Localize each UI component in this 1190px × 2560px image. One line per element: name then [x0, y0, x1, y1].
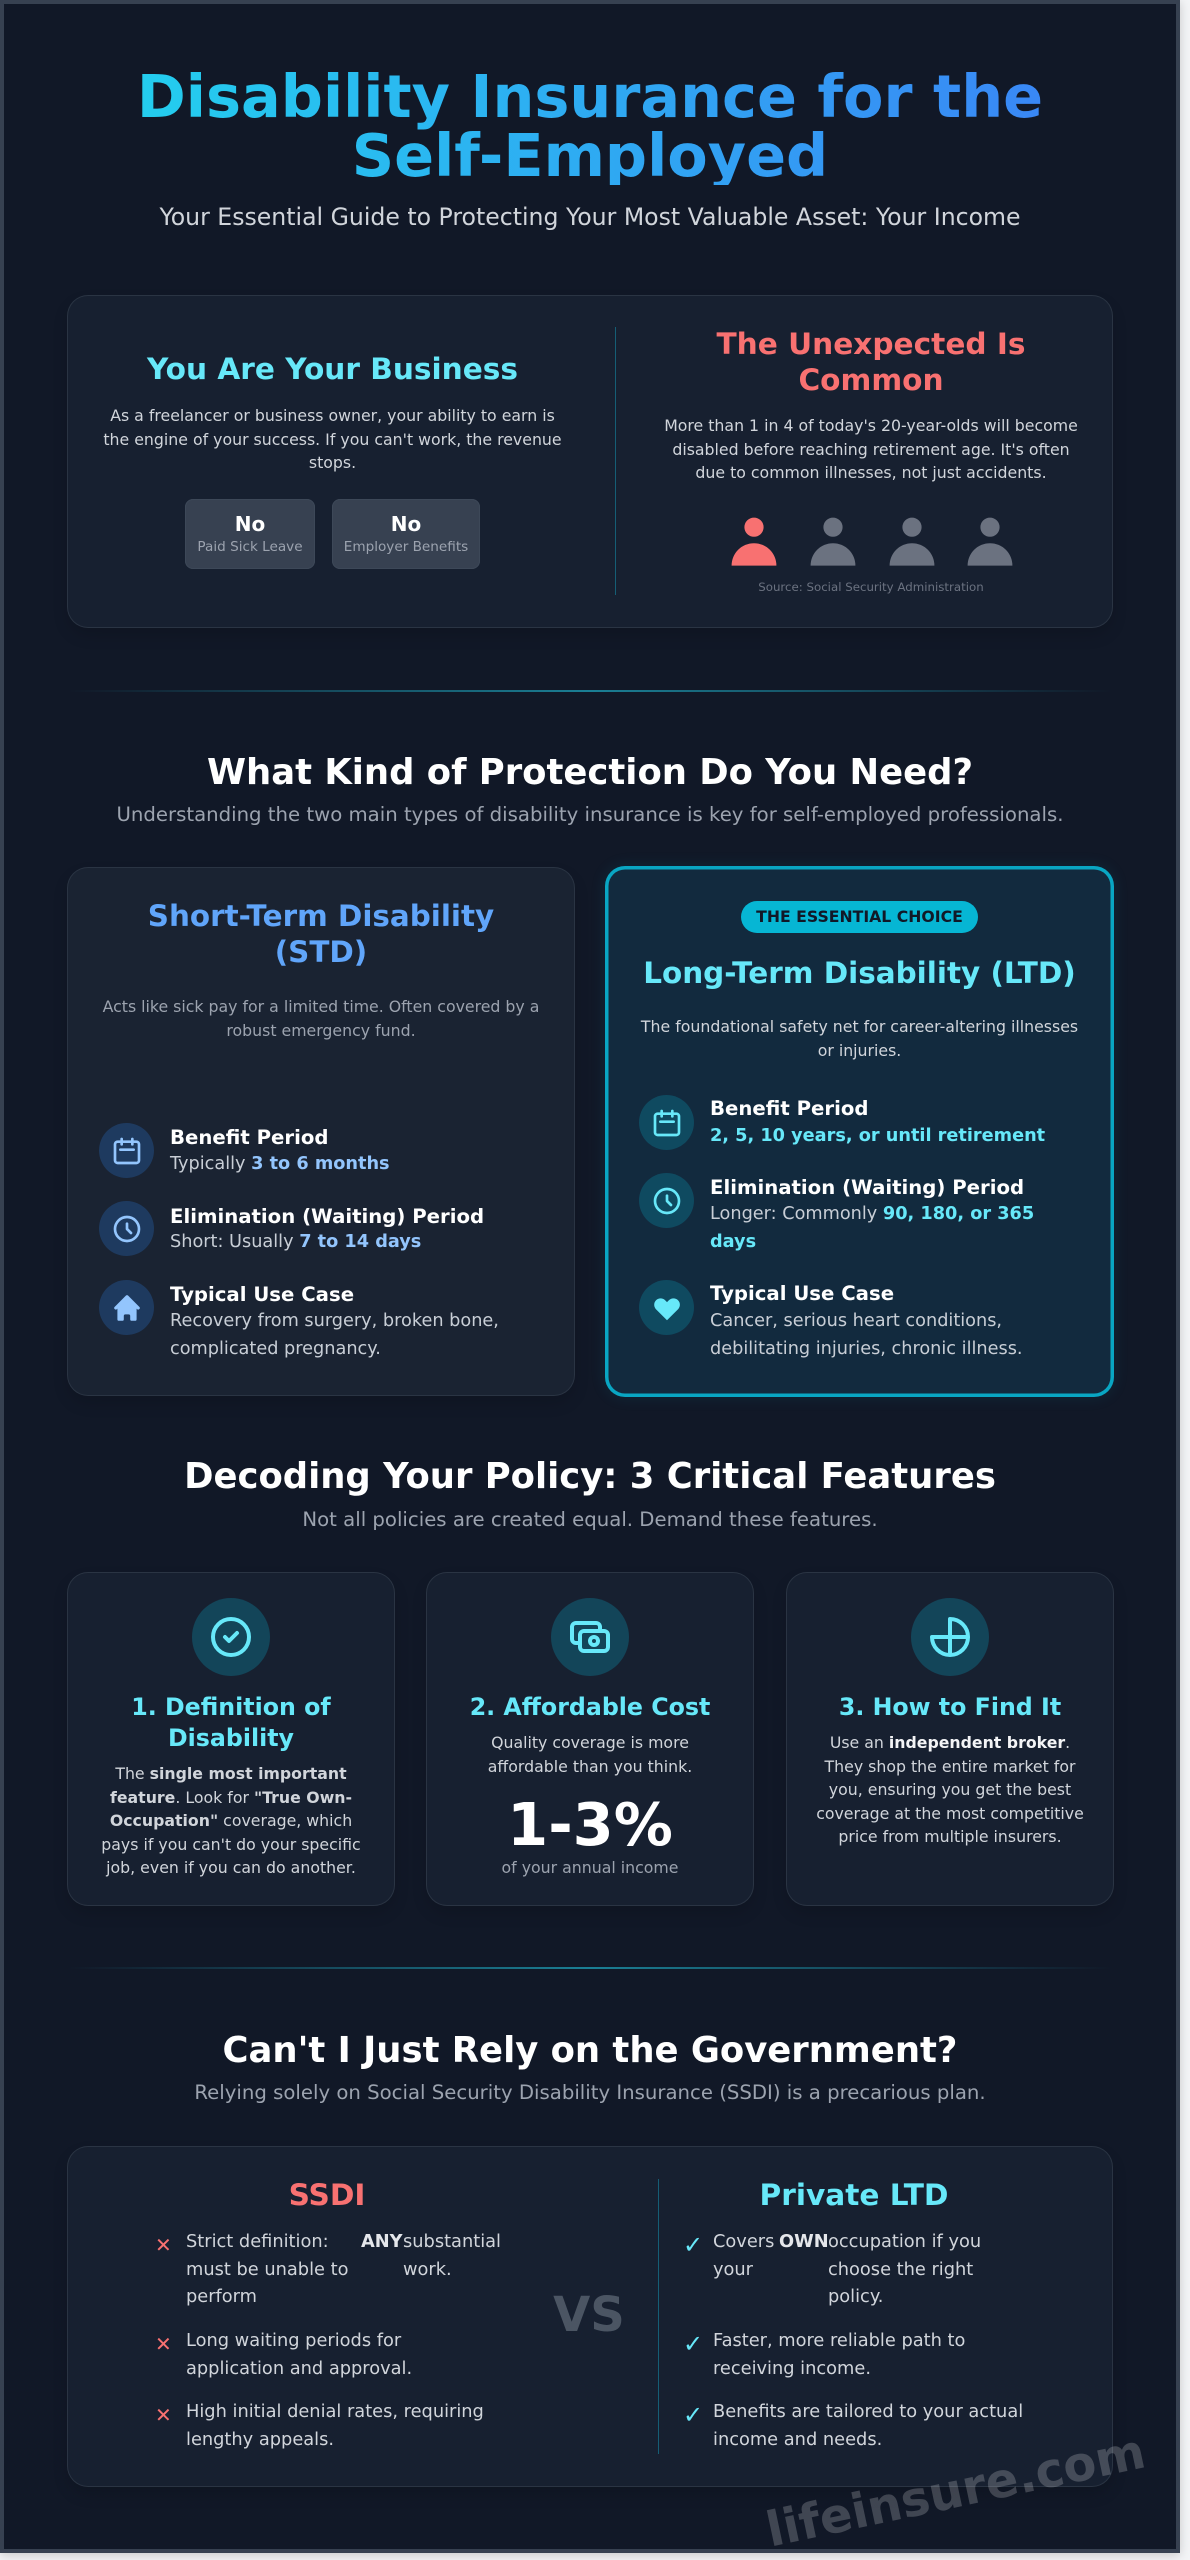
row: typical use case: complicated pregnancy. [170, 1339, 381, 1359]
item: covers own occupation: policy. [828, 2286, 883, 2307]
badge: no employer benefits: Employer Benefits [344, 539, 468, 555]
subheading: decoding: Not all policies are created equal. Demand these features. [302, 1508, 878, 1531]
heading: 1. Definition of [131, 1693, 331, 1721]
text: STD: robust emergency fund. [226, 1020, 416, 1040]
item: faster path: ✓ [683, 2330, 703, 2358]
row: elimination period: Elimination (Waiting) Period [710, 1176, 1024, 1199]
panel: short-term disability [68, 868, 574, 1395]
text [816, 1733, 1084, 1846]
item: denial rates: High initial denial rates, requiring [186, 2401, 484, 2422]
item: tailored benefits: ✓ [683, 2401, 703, 2429]
row: benefit period [639, 1095, 1045, 1150]
text: you are your business: As a freelancer or business owner, your ability to earn is [110, 406, 555, 425]
text: you are your business: stops. [309, 453, 356, 472]
text: job, even if you can do another. [106, 1858, 356, 1877]
card: definition of disability [68, 1573, 394, 1905]
badge: no employer benefits: No [391, 512, 421, 536]
item: denial rates: lengthy appeals. [186, 2429, 334, 2450]
row: elimination period: Elimination (Waiting) Period [170, 1205, 484, 1228]
text: LTD: The foundational safety net for career-altering illnesses [641, 1017, 1078, 1036]
item: strict definition: substantial [403, 2231, 501, 2252]
text: STD: Acts like sick pay for a limited time. Often covered by a [103, 997, 539, 1016]
item: long waiting: Long waiting periods for [186, 2330, 401, 2351]
heading: the unexpected is common: Common [798, 363, 944, 397]
row: benefit period: 2, 5, 10 years, or until retirement [710, 1126, 1045, 1146]
heading: the unexpected is common: The Unexpected Is [716, 327, 1026, 361]
title: Self-Employed [352, 121, 828, 190]
item: strict definition: ✕ [155, 2233, 172, 2257]
icon: calendar [99, 1123, 154, 1178]
text: you, ensuring you get the best [829, 1780, 1071, 1799]
row: benefit period: Typically 3 to 6 months [170, 1154, 390, 1174]
badge: the essential choice: THE ESSENTIAL CHOICE [756, 907, 963, 926]
item: strict definition: must be unable to [186, 2259, 348, 2280]
source note: Source: Social Security Administration [758, 580, 984, 594]
item: strict definition: Strict definition: [186, 2231, 329, 2252]
text: the unexpected is common: due to common illnesses, not just accidents. [695, 463, 1047, 482]
item: long waiting: application and approval. [186, 2358, 412, 2379]
icon: clock [639, 1173, 694, 1228]
item: tailored benefits: Benefits are tailored to your actual [713, 2401, 1023, 2422]
heading: 2. Affordable Cost [470, 1693, 710, 1721]
item: strict definition: perform [186, 2286, 257, 2307]
item: faster path: receiving income. [713, 2358, 871, 2379]
title [68, 67, 1112, 185]
icon: cash [551, 1598, 629, 1676]
text: pays if you can't do your specific [101, 1835, 361, 1854]
heading: government: Can't I Just Rely on the Government? [223, 2030, 957, 2071]
item: long waiting: ✕ [155, 2332, 172, 2356]
item: covers own occupation: choose the right [828, 2259, 973, 2280]
text: Occupation" coverage, which [110, 1811, 352, 1830]
row: benefit period: Benefit Period [710, 1097, 868, 1120]
icon: quartered circle [911, 1598, 989, 1676]
text: STD [102, 997, 539, 1040]
item: long waiting [155, 2330, 412, 2379]
card: affordable cost [427, 1573, 753, 1905]
badge: no employer benefits [332, 499, 480, 569]
text: They shop the entire market for [825, 1757, 1075, 1776]
row: benefit period [99, 1123, 390, 1178]
text: price from multiple insurers. [838, 1827, 1062, 1846]
card: how to find it [787, 1573, 1113, 1905]
subheading: protection: Understanding the two main types of disability insurance is key for self-employed professionals. [116, 803, 1063, 826]
icon: heart [639, 1280, 694, 1335]
text: LTD: or injuries. [818, 1040, 901, 1060]
item: strict definition [155, 2231, 501, 2307]
item: covers own occupation [683, 2231, 981, 2307]
panel: intro [68, 296, 1112, 627]
text: Use an independent broker. [830, 1733, 1070, 1752]
row: elimination period: Longer: Commonly 90, 180, or 365 [710, 1204, 1034, 1224]
badge: no paid sick leave: No [235, 512, 265, 536]
heading: STD: (STD) [275, 934, 367, 968]
text: Quality coverage is more [491, 1733, 689, 1752]
text: the unexpected is common: More than 1 in 4 of today's 20-year-olds will become [664, 416, 1078, 435]
icon: calendar [639, 1095, 694, 1150]
row: typical use case: Typical Use Case [710, 1282, 894, 1305]
icon: home [99, 1280, 154, 1335]
text: the unexpected is common [664, 416, 1078, 482]
icon: clock [99, 1201, 154, 1256]
badge: no paid sick leave: Paid Sick Leave [197, 539, 303, 555]
subtitle: Your Essential Guide to Protecting Your Most Valuable Asset: Your Income [159, 203, 1021, 231]
item: covers own occupation: occupation if you [828, 2231, 981, 2252]
stat: 1-3%: 1-3% [507, 1790, 673, 1859]
VS label: VS [553, 2287, 625, 2343]
text: you are your business [103, 406, 562, 472]
row: typical use case: Cancer, serious heart conditions, [710, 1311, 1002, 1331]
heading: protection: What Kind of Protection Do You Need? [207, 752, 973, 793]
panel: long-term disability [605, 866, 1114, 1397]
heading: private LTD: Private LTD [760, 2178, 948, 2212]
item: strict definition: ANY [361, 2231, 403, 2252]
icon: check circle [192, 1598, 270, 1676]
heading: you are your business: You Are Your Business [147, 352, 518, 386]
badge: the essential choice [741, 901, 978, 933]
heading: Disability [168, 1724, 294, 1752]
row: elimination period: days [710, 1232, 756, 1252]
text: you are your business: the engine of your success. If you can't work, the revenue [103, 430, 562, 449]
panel: SSDI vs private LTD [68, 2147, 1112, 2486]
item: strict definition: work. [403, 2259, 452, 2280]
item: denial rates: ✕ [155, 2403, 172, 2427]
row: typical use case: Recovery from surgery, broken bone, [170, 1311, 499, 1331]
item: covers own occupation: ✓ [683, 2231, 703, 2259]
heading: LTD: Long-Term Disability (LTD) [643, 956, 1076, 990]
text: feature. Look for "True Own- [110, 1788, 352, 1807]
badge: no paid sick leave [185, 499, 315, 569]
row: typical use case [639, 1280, 1023, 1359]
subheading: government: Relying solely on Social Security Disability Insurance (SSDI) is a precarious plan. [194, 2081, 986, 2104]
text [488, 1733, 692, 1776]
text: affordable than you think. [488, 1757, 692, 1776]
heading: STD [148, 899, 494, 968]
text: The single most important [115, 1764, 347, 1783]
heading: decoding: Decoding Your Policy: 3 Critical Features [184, 1456, 996, 1497]
text: LTD [640, 1017, 1078, 1060]
item: covers own occupation: OWN [779, 2231, 829, 2252]
item: faster path [683, 2330, 965, 2379]
item: tailored benefits [683, 2401, 1023, 2450]
item: covers own occupation: Covers [713, 2231, 774, 2252]
heading [131, 1693, 331, 1752]
text: the unexpected is common: disabled before reaching retirement age. It's often [672, 440, 1070, 459]
item: denial rates [155, 2401, 484, 2450]
item: tailored benefits: income and needs. [713, 2429, 882, 2450]
row: elimination period: Short: Usually 7 to 14 days [170, 1232, 421, 1252]
row: elimination period [99, 1201, 484, 1256]
stat label: of your annual income [502, 1858, 678, 1877]
heading: SSDI: SSDI [289, 2178, 365, 2212]
heading: the unexpected is common [716, 327, 1026, 397]
title: Disability Insurance for the [137, 62, 1043, 131]
item: covers own occupation: your [713, 2259, 753, 2280]
row: typical use case [99, 1280, 499, 1359]
row: typical use case: Typical Use Case [170, 1283, 354, 1306]
heading: 3. How to Find It [839, 1693, 1061, 1721]
item: faster path: Faster, more reliable path to [713, 2330, 965, 2351]
row: benefit period: Benefit Period [170, 1126, 328, 1149]
icon row: 1 in 4 people [732, 518, 1012, 566]
text: coverage at the most competitive [816, 1804, 1084, 1823]
heading: STD: Short-Term Disability [148, 899, 494, 933]
row: typical use case: debilitating injuries, chronic illness. [710, 1339, 1023, 1359]
text [101, 1764, 361, 1877]
row: elimination period [639, 1173, 1034, 1252]
